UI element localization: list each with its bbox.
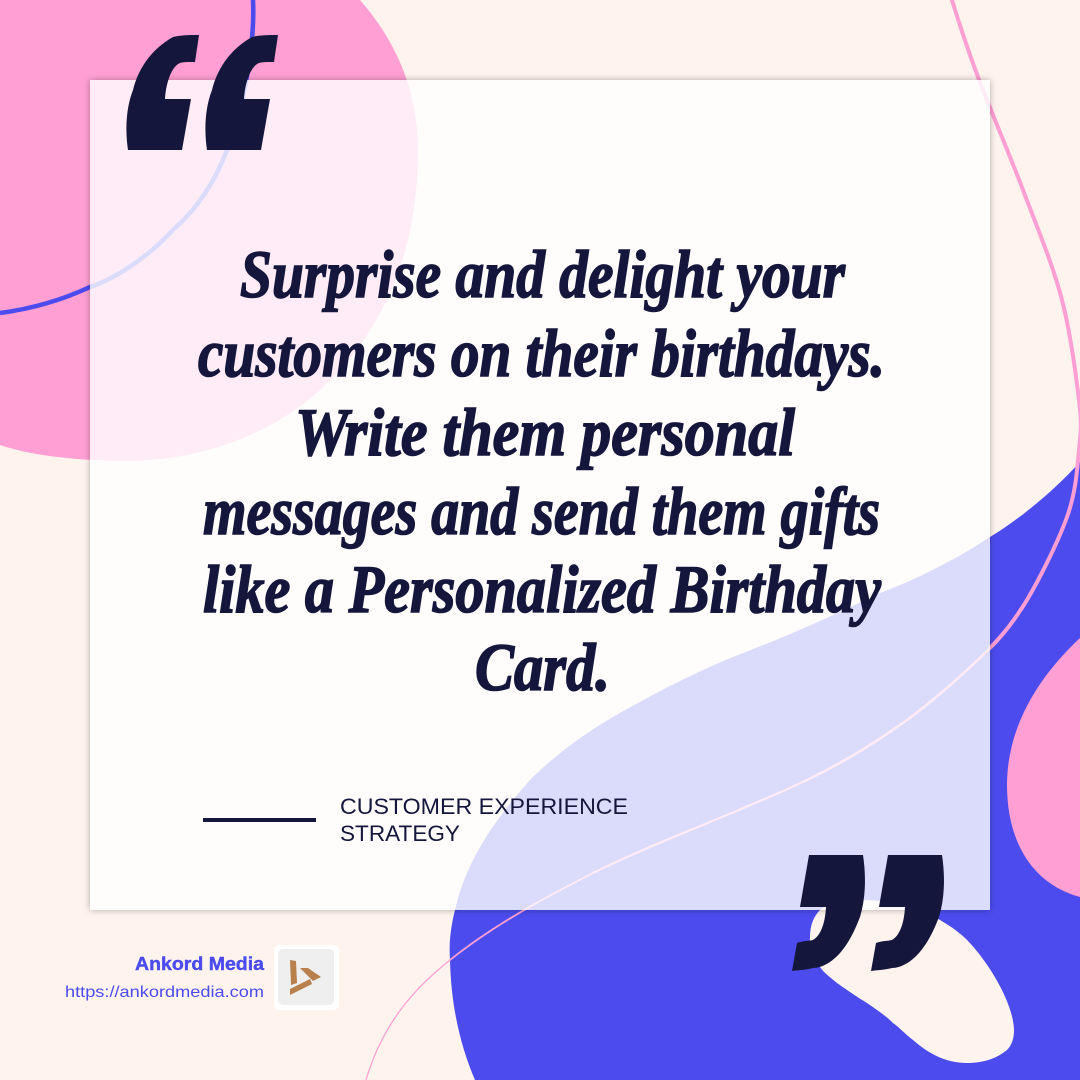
quote text: Card.: [475, 629, 610, 705]
attribution rule: [203, 818, 316, 822]
blue curved line: [0, 0, 253, 313]
attribution text: CUSTOMER EXPERIENCE: [340, 794, 628, 819]
blue wave shape: bottom right: [450, 462, 1080, 1080]
quote card: [90, 80, 990, 910]
attribution text: [340, 794, 628, 846]
icon: closing quotation mark: [792, 855, 944, 971]
pink curved line: [366, 0, 1080, 1080]
pink blob: top left: [0, 0, 418, 461]
brand name and url: [65, 954, 265, 1001]
quote text: Write them personal: [295, 394, 795, 470]
quote text: like a Personalized Birthday: [203, 551, 882, 627]
pink blob: right edge: [1007, 638, 1080, 897]
quote text: Surprise and delight your: [240, 236, 845, 312]
icon: brand logo: [274, 945, 339, 1010]
quote text: messages and send them gifts: [203, 473, 880, 549]
brand name and url: https://ankordmedia.com: [65, 984, 264, 1001]
brand name and url: Ankord Media: [135, 954, 265, 974]
quote text: [198, 236, 885, 705]
quote text: customers on their birthdays.: [198, 315, 885, 391]
card shadow: [90, 80, 990, 910]
cream cutout in blue shape: [810, 900, 1014, 1063]
attribution text: STRATEGY: [340, 821, 460, 846]
icon: opening quotation mark: [126, 35, 278, 150]
